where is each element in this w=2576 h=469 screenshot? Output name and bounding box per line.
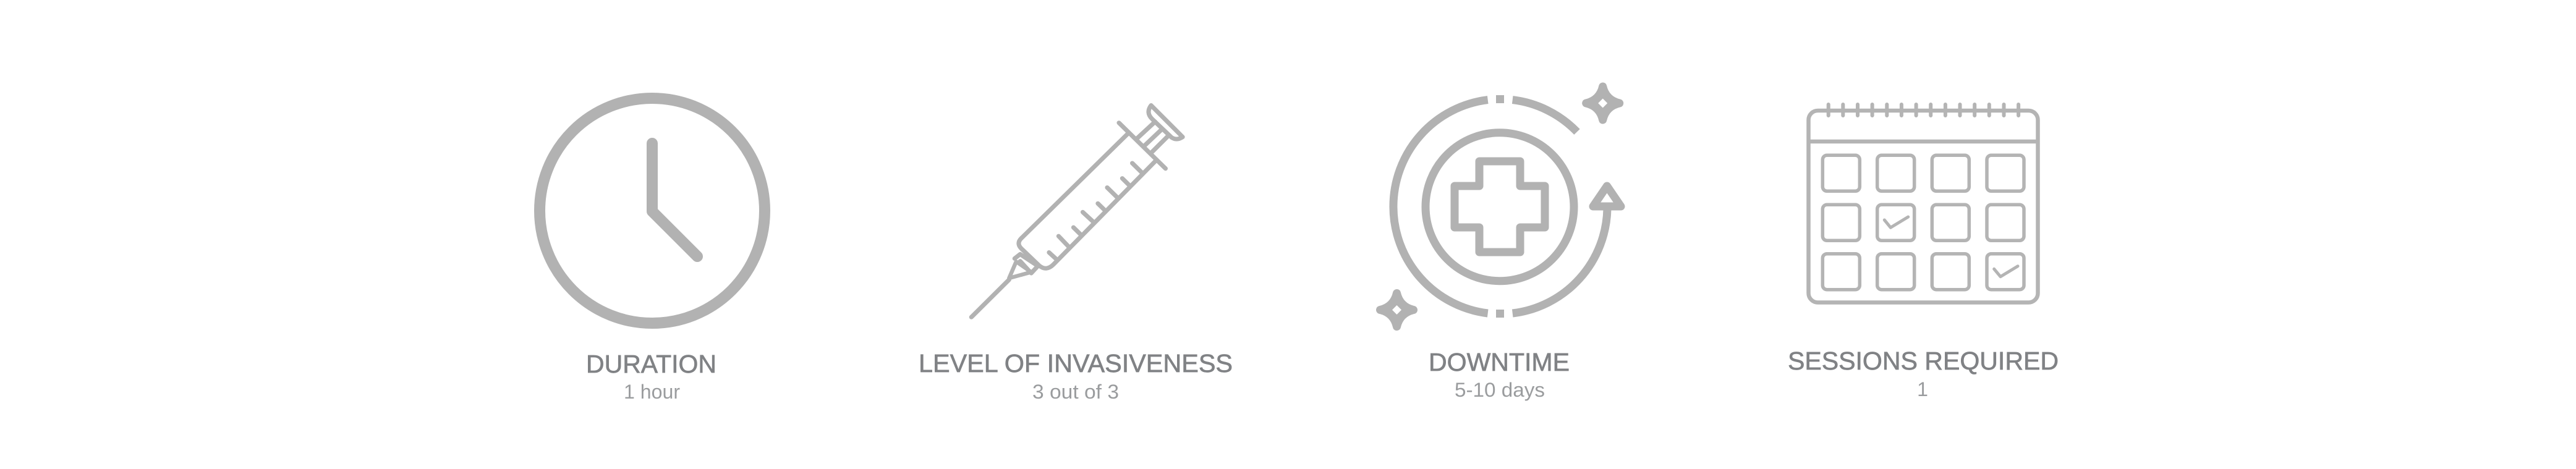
value: downtime: 5-10 days bbox=[1455, 379, 1545, 401]
value: level of invasiveness: 3 out of 3 bbox=[1032, 381, 1119, 403]
panel: downtime bbox=[1380, 87, 1621, 401]
value: duration: 1 hour bbox=[624, 381, 680, 403]
value: sessions required: 1 bbox=[1917, 378, 1928, 400]
heading: downtime: DOWNTIME bbox=[1429, 348, 1570, 376]
heading: level of invasiveness: LEVEL OF INVASIVENESS bbox=[919, 349, 1233, 378]
icon: sparkle top right bbox=[1586, 87, 1620, 120]
heading: sessions required: SESSIONS REQUIRED bbox=[1788, 347, 2059, 375]
icon: recovery cycle with medical cross bbox=[1393, 95, 1621, 318]
icon: calendar bbox=[1809, 104, 2038, 303]
heading: duration: DURATION bbox=[586, 350, 716, 378]
icon: clock bbox=[540, 98, 765, 323]
panel: sessions required bbox=[1788, 104, 2059, 400]
icon: syringe bbox=[971, 106, 1183, 317]
panel: level of invasiveness bbox=[919, 106, 1233, 403]
panel: duration bbox=[540, 98, 765, 403]
icon: sparkle bottom left bbox=[1380, 293, 1413, 326]
